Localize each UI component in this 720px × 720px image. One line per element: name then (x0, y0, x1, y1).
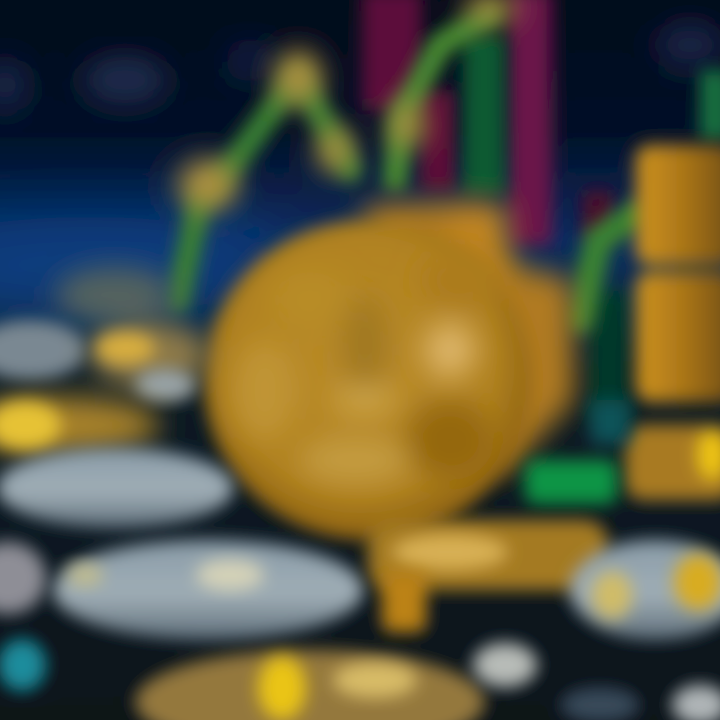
gold bar foreground (368, 520, 608, 632)
coin rear edge (360, 200, 575, 480)
coin emboss (233, 250, 500, 482)
coin face (204, 220, 532, 540)
gold coin stack right (625, 145, 720, 500)
chart: green bars (463, 35, 720, 420)
chart: faded bars left (55, 267, 175, 323)
bottom coins (135, 643, 720, 720)
market chart (55, 0, 720, 420)
large gold coin (204, 200, 575, 540)
chart: maroon bars (362, 0, 614, 245)
right silver coin (570, 540, 720, 640)
left coin stack (0, 320, 363, 691)
green block (525, 400, 630, 504)
chart: highlights on trend line (178, 0, 518, 211)
chart: rising trend line (178, 15, 635, 320)
